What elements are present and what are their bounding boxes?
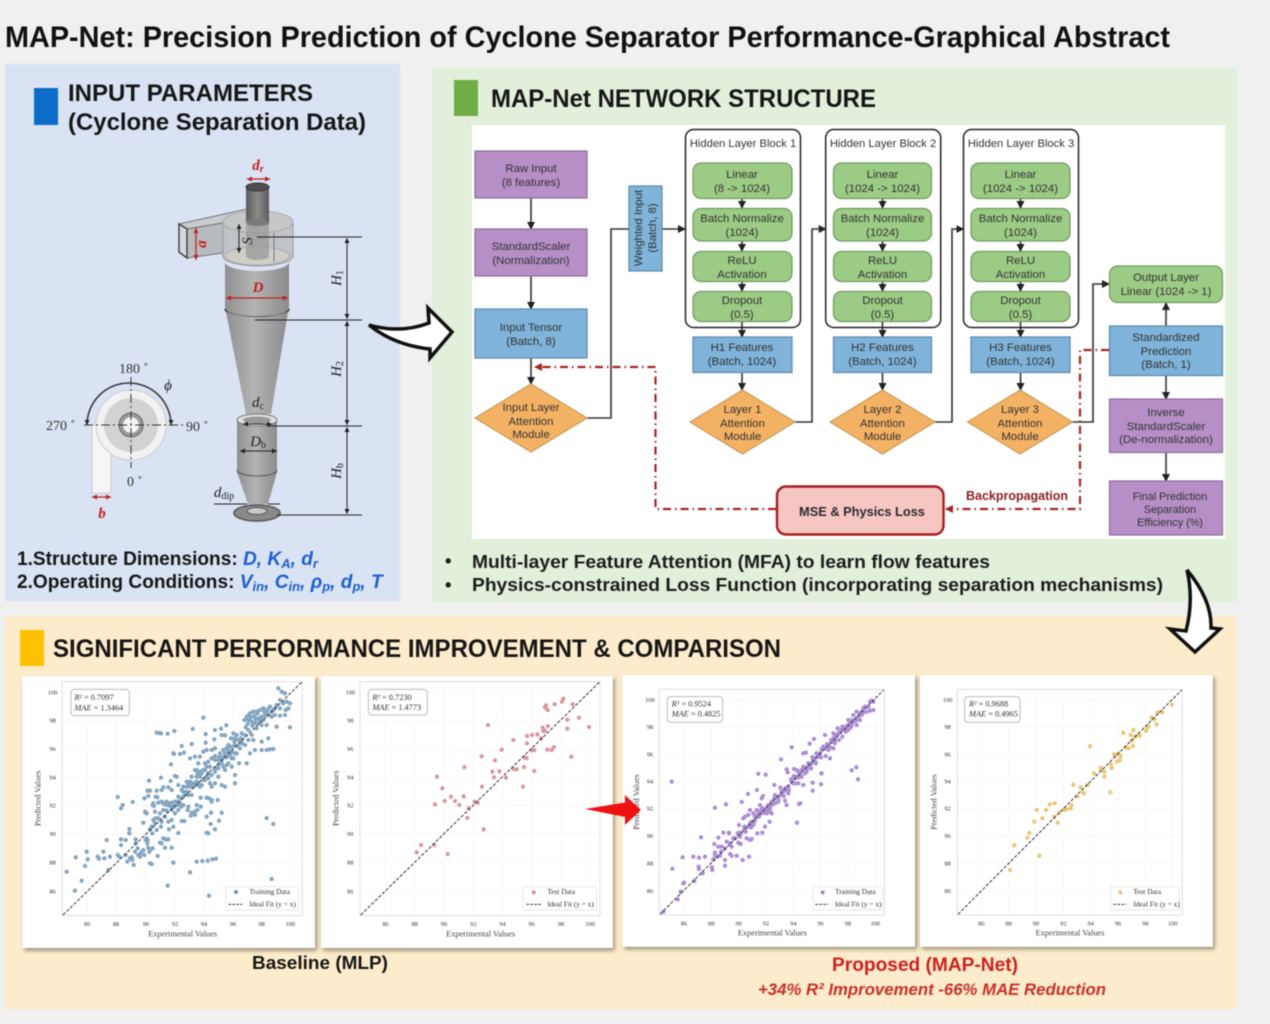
node: standard scaler: [475, 229, 587, 276]
axis labels: 98: [945, 724, 951, 731]
axis labels: 90: [347, 831, 353, 838]
node: layer 3 attention: Attention: [998, 418, 1042, 430]
hidden layer block 2: (1024): [866, 227, 899, 239]
hidden layer block 1: ReLU: [727, 255, 757, 267]
text: input parameter list: A: [280, 556, 291, 571]
axis labels: 98: [50, 718, 56, 725]
node: final prediction: Final Prediction: [1133, 491, 1207, 503]
heading: input parameters: INPUT PARAMETERS: [68, 80, 313, 107]
axis labels: [331, 689, 595, 939]
axis labels: 94: [1088, 920, 1095, 927]
flowchart: [472, 125, 1225, 539]
diagram: cyclone top view: [46, 362, 208, 522]
dimension labels: black: S: [240, 237, 256, 245]
text: input parameter list: in: [288, 579, 300, 594]
node: layer 1 attention: Module: [724, 431, 761, 443]
dimension labels: black: d: [252, 395, 260, 411]
legend: Training Data: [249, 887, 291, 896]
hidden layer block 2: (0.5): [871, 309, 894, 321]
axis labels: 96: [50, 746, 56, 753]
hidden layer block 3: [964, 130, 1078, 328]
node: raw input: Raw Input: [505, 163, 557, 175]
axis labels: 92: [647, 806, 653, 813]
stats box: [667, 697, 723, 722]
stats box: [965, 697, 1020, 722]
axis labels: 88: [1006, 920, 1012, 927]
node: H2 features: [834, 337, 932, 372]
diagram: cyclone top view: b: [98, 506, 106, 522]
node: weighted input: (Batch, 8): [647, 203, 659, 253]
hidden layer block 3: Batch Normalize: [979, 213, 1062, 225]
axis labels: 92: [50, 803, 56, 810]
dimension lines: cyclone heights: [214, 224, 362, 515]
axis labels: Predicted Values: [632, 774, 641, 830]
axis labels: [632, 697, 880, 937]
axis labels: 86: [50, 888, 56, 895]
axis labels: 90: [143, 921, 149, 928]
axis labels: 96: [818, 920, 824, 927]
axis labels: 88: [113, 921, 119, 928]
axis labels: 96: [347, 746, 353, 753]
text: input parameter list: , d: [329, 572, 353, 593]
hidden layer block 3: (0.5): [1009, 309, 1032, 321]
node: output layer: Linear (1024 -> 1): [1121, 286, 1212, 298]
node: layer 2 attention: Layer 2: [864, 404, 902, 416]
node: final prediction: Efficiency (%): [1137, 517, 1203, 529]
axis labels: 92: [1060, 920, 1066, 927]
dimension labels: black: H: [329, 275, 345, 286]
node: standard scaler: StandardScaler: [492, 241, 570, 253]
text: input parameter list: 1.Structure Dimensions: D, K: [17, 549, 281, 570]
node: input layer attention: Input Layer: [502, 402, 560, 414]
diagram: cyclone side view: [179, 183, 293, 521]
node: layer 2 attention: Module: [864, 431, 901, 443]
axis labels: 90: [647, 833, 653, 840]
axis labels: 94: [201, 921, 208, 928]
axis labels: 96: [230, 921, 236, 928]
node: inverse scaler: (De-normalization): [1119, 434, 1213, 446]
heading: network structure: MAP-Net NETWORK STRUCTURE: [491, 85, 876, 113]
text: network bullets: Multi-layer Feature Attention (MFA) to learn flow features: [472, 551, 990, 572]
text: network bullets: [445, 550, 1163, 595]
panel: input parameters: [5, 64, 400, 601]
node: H3 features: [971, 337, 1070, 372]
axis labels: 90: [736, 920, 742, 927]
ideal fit line: [958, 690, 1182, 914]
axis labels: 100: [346, 689, 355, 696]
dimension labels: black: b: [335, 463, 346, 468]
text: input parameter list: r: [313, 556, 319, 571]
stats box: [71, 689, 129, 716]
stats box: MAE = 1.3464: [73, 704, 124, 713]
node: inverse scaler: StandardScaler: [1127, 421, 1205, 433]
node: standardized prediction: [1110, 326, 1222, 376]
node: inverse scaler: Inverse: [1147, 407, 1185, 419]
heading: performance comparison: SIGNIFICANT PERFORMANCE IMPROVEMENT & COMPARISON: [53, 635, 781, 663]
axis labels: 96: [1115, 920, 1121, 927]
node: layer 1 attention: [690, 390, 795, 454]
node: input layer attention: Attention: [509, 416, 553, 428]
axis labels: 86: [347, 888, 353, 895]
text: network bullets: •: [445, 574, 451, 595]
node: standard scaler: (Normalization): [492, 255, 570, 267]
text: input parameter list: , T: [359, 572, 384, 593]
node: layer 3 attention: Module: [1001, 431, 1039, 443]
node: output layer: Output Layer: [1133, 272, 1199, 284]
text: input parameter list: p: [321, 579, 330, 594]
axis labels: 86: [383, 921, 389, 928]
axis labels: 88: [412, 921, 418, 928]
ideal fit line: [660, 690, 884, 914]
text: input parameter list: 2.Operating Conditions: V: [17, 572, 253, 593]
node: inverse scaler: [1110, 399, 1222, 452]
node: raw input: (8 features): [502, 177, 560, 189]
axis labels: 100: [585, 921, 595, 928]
node: layer 2 attention: Attention: [860, 418, 905, 430]
legend: Ideal Fit (y = x): [249, 900, 296, 909]
node: weighted input: Weighted Input: [633, 189, 645, 266]
dimension labels: red: [194, 158, 288, 298]
axis labels: Predicted Values: [930, 774, 939, 830]
node: H1 features: [693, 337, 792, 372]
dimension labels: black: d: [214, 485, 221, 501]
legend: Test Data: [547, 887, 576, 896]
axis labels: 100: [286, 921, 295, 928]
node: layer 1 attention: Layer 1: [724, 404, 762, 416]
ideal fit line: [361, 682, 599, 915]
diagram: cyclone top view: ϕ: [164, 378, 172, 394]
axis labels: 98: [347, 718, 353, 725]
node: loss: [777, 486, 944, 534]
axis labels: 88: [708, 920, 714, 927]
node: layer 3 attention: Layer 3: [1001, 404, 1039, 416]
legend: Training Data: [835, 887, 876, 896]
icon: green section marker: [454, 80, 478, 116]
hidden layer block 2: Dropout: [862, 295, 904, 307]
stats box: R² = 0.9524: [671, 700, 712, 709]
node: H2 features: (Batch, 1024): [848, 356, 917, 368]
panel: performance comparison: [5, 616, 1237, 1009]
dimension labels: black: dip: [221, 491, 234, 502]
text: input parameter list: in: [253, 579, 264, 594]
connectors: [531, 198, 1166, 481]
node: layer 3 attention: [968, 390, 1072, 454]
axis labels: 86: [978, 920, 984, 927]
hidden layer block 3: Dropout: [1000, 295, 1042, 307]
backpropagation arrows: [535, 350, 1109, 509]
hidden layer block 2: [826, 130, 941, 328]
axis labels: 100: [943, 697, 952, 704]
text: input parameter list: p: [351, 579, 360, 594]
node: output layer: [1110, 266, 1222, 302]
axis labels: Predicted Values: [34, 771, 43, 826]
arrow: baseline to proposed: [585, 795, 641, 825]
node: H3 features: (Batch, 1024): [986, 356, 1055, 368]
axis labels: 100: [1168, 920, 1177, 927]
icon: blue section marker: [34, 88, 58, 125]
chart: baseline training scatter: [22, 676, 315, 948]
stats box: MAE = 1.4773: [371, 703, 421, 712]
dimension labels: black: H: [329, 468, 345, 479]
hidden layer block 1: [686, 130, 800, 328]
node: H1 features: (Batch, 1024): [708, 356, 776, 368]
axis labels: 88: [647, 861, 653, 868]
legend: Ideal Fit (y = x): [547, 900, 594, 909]
hidden layer block 1: Linear: [726, 169, 758, 181]
hidden layer block 2: Linear: [867, 169, 899, 181]
node: input tensor: [475, 309, 587, 358]
chart: proposed test scatter: [920, 675, 1213, 947]
chart: baseline test scatter: [321, 676, 613, 948]
hidden layer block 1: (1024): [726, 227, 759, 239]
dimension labels: black: H: [329, 366, 345, 377]
heading: input parameters: [68, 80, 366, 136]
dimension labels: red: r: [260, 164, 264, 175]
arrow: network to performance: [1170, 570, 1220, 652]
hidden layer block 1: Dropout: [722, 295, 763, 307]
axis labels: Experimental Values: [1035, 928, 1104, 937]
hidden layer block 3: Activation: [996, 269, 1045, 281]
axis labels: 90: [441, 921, 447, 928]
data points: [663, 701, 873, 912]
axis labels: 94: [500, 921, 507, 928]
legend: Test Data: [1133, 887, 1162, 896]
axis labels: 100: [48, 689, 57, 696]
axis labels: Experimental Values: [738, 928, 807, 937]
node: final prediction: [1110, 481, 1222, 535]
axis labels: 100: [645, 697, 655, 704]
axis labels: 98: [558, 921, 564, 928]
axis labels: 90: [50, 831, 56, 838]
legend: [813, 887, 882, 910]
axis labels: 88: [347, 860, 353, 867]
diagram: cyclone top view: 180 ˚: [119, 362, 148, 377]
legend: [523, 887, 597, 910]
axis labels: 96: [647, 751, 653, 758]
axis labels: 86: [84, 921, 90, 928]
text: input parameter list: [17, 549, 384, 594]
axis labels: 92: [172, 921, 178, 928]
dimension labels: black: 2: [335, 361, 346, 366]
hidden layer block 2: (1024 -> 1024): [845, 183, 920, 195]
chart: proposed training scatter: [622, 675, 915, 947]
text: input parameter list: , d: [290, 549, 313, 570]
heading: input parameters: (Cyclone Separation Data): [68, 109, 366, 136]
axis labels: 98: [259, 921, 265, 928]
axis labels: 92: [347, 803, 353, 810]
hidden layer block 1: (0.5): [730, 309, 754, 321]
legend: Ideal Fit (y = x): [1133, 900, 1180, 909]
dimension labels: black: D: [250, 434, 261, 450]
dimension labels: black: b: [261, 440, 266, 451]
label: proposed: Proposed (MAP-Net): [832, 954, 1018, 976]
node: final prediction: Separation: [1144, 504, 1196, 516]
hidden layer block 2: ReLU: [868, 255, 897, 267]
node: H3 features: H3 Features: [989, 342, 1052, 354]
axis labels: 94: [945, 779, 952, 786]
legend: [226, 887, 298, 910]
hidden layer block 2: Activation: [858, 269, 907, 281]
hidden layer block 2: Batch Normalize: [841, 213, 924, 225]
axis labels: 88: [945, 861, 951, 868]
node: input layer attention: [475, 384, 587, 452]
text: input parameter list: , ρ: [299, 572, 322, 593]
axis labels: 96: [945, 751, 951, 758]
node: loss: MSE & Physics Loss: [799, 504, 925, 519]
hidden layer block 3: (1024): [1004, 227, 1037, 239]
dimension labels: red: d: [252, 158, 260, 174]
node: layer 2 attention: [830, 390, 935, 454]
stats box: R² = 0.9688: [968, 700, 1008, 709]
axis labels: 90: [1033, 920, 1039, 927]
diagram: cyclone top view: 90 ˚: [186, 420, 208, 435]
hidden layer block 3: Linear: [1005, 169, 1037, 181]
dimension labels: black: [214, 237, 346, 502]
axis labels: 94: [790, 920, 797, 927]
axis labels: 86: [945, 888, 951, 895]
hidden layer block 1: (8 -> 1024): [714, 183, 770, 195]
icon: yellow section marker: [20, 630, 44, 666]
axis labels: 92: [763, 920, 769, 927]
hidden layer block 2: Hidden Layer Block 2: [830, 138, 936, 150]
label: improvement: +34% R² Improvement -66% MAE Reduction: [758, 981, 1106, 999]
diagram: cyclone top view: 0 ˚: [127, 475, 142, 490]
data points: [417, 699, 589, 854]
label: baseline: Baseline (MLP): [252, 952, 388, 973]
axis labels: [930, 697, 1177, 937]
axis labels: 98: [845, 920, 851, 927]
node: H1 features: H1 Features: [711, 342, 774, 354]
axis labels: [34, 689, 295, 939]
data points: [67, 688, 290, 896]
stats box: MAE = 0.4825: [671, 710, 721, 719]
node: input layer attention: Module: [512, 429, 550, 441]
stats box: R² = 0.7230: [371, 693, 412, 702]
legend: Ideal Fit (y = x): [835, 900, 882, 909]
node: layer 1 attention: Attention: [720, 418, 765, 430]
node: raw input: [475, 151, 587, 198]
node: weighted input: [629, 186, 662, 271]
hidden layer block 3: ReLU: [1006, 255, 1035, 267]
stats box: [368, 689, 427, 715]
axis labels: 100: [871, 920, 880, 927]
stats box: R² = 0.7097: [73, 693, 114, 702]
axis labels: Experimental Values: [446, 930, 515, 939]
text: network bullets: Physics-constrained Loss Function (incorporating separation mechanisms): [472, 574, 1163, 595]
dimension labels: black: c: [260, 401, 265, 412]
node: standardized prediction: Prediction: [1141, 346, 1191, 358]
axis labels: 92: [470, 921, 476, 928]
node: input tensor: (Batch, 8): [506, 336, 556, 348]
hidden layer block 1: Batch Normalize: [700, 213, 784, 225]
axis labels: 98: [1142, 920, 1148, 927]
axis labels: 94: [647, 779, 654, 786]
dimension labels: red: D: [252, 280, 264, 296]
hidden layer block 1: Activation: [717, 269, 767, 281]
node: H2 features: H2 Features: [851, 342, 914, 354]
text: input parameter list: , C: [263, 572, 290, 593]
text: network bullets: •: [445, 550, 451, 571]
axis labels: 86: [681, 920, 687, 927]
legend: [1111, 887, 1180, 910]
axis labels: 90: [945, 833, 951, 840]
arrow: input to network: [369, 308, 452, 358]
ideal fit line: [63, 682, 302, 915]
axis labels: 88: [50, 860, 56, 867]
hidden layer block 3: Hidden Layer Block 3: [968, 138, 1074, 150]
node: input tensor: Input Tensor: [500, 322, 562, 334]
diagram: cyclone top view: 270 ˚: [46, 419, 75, 434]
axis labels: 86: [647, 888, 653, 895]
panel: network structure: [432, 67, 1237, 602]
axis labels: 96: [529, 921, 535, 928]
label: backpropagation: Backpropagation: [966, 489, 1068, 503]
axis labels: 92: [945, 806, 951, 813]
hidden layer block 1: Hidden Layer Block 1: [690, 138, 796, 150]
title: MAP-Net: Precision Prediction of Cyclone Separator Performance-Graphical Abstract: [5, 21, 1170, 54]
hidden layer block 3: (1024 -> 1024): [983, 183, 1058, 195]
node: standardized prediction: Standardized: [1132, 332, 1200, 344]
axis labels: 94: [347, 774, 354, 781]
node: standardized prediction: (Batch, 1): [1141, 359, 1191, 371]
axis labels: Predicted Values: [331, 771, 340, 826]
axis labels: Experimental Values: [148, 930, 217, 939]
axis labels: 98: [647, 724, 653, 731]
axis labels: 94: [50, 774, 57, 781]
data points: [1010, 705, 1172, 870]
dimension labels: black: 1: [335, 270, 346, 275]
stats box: MAE = 0.4965: [968, 710, 1018, 719]
dimension labels: red: a: [194, 240, 210, 248]
